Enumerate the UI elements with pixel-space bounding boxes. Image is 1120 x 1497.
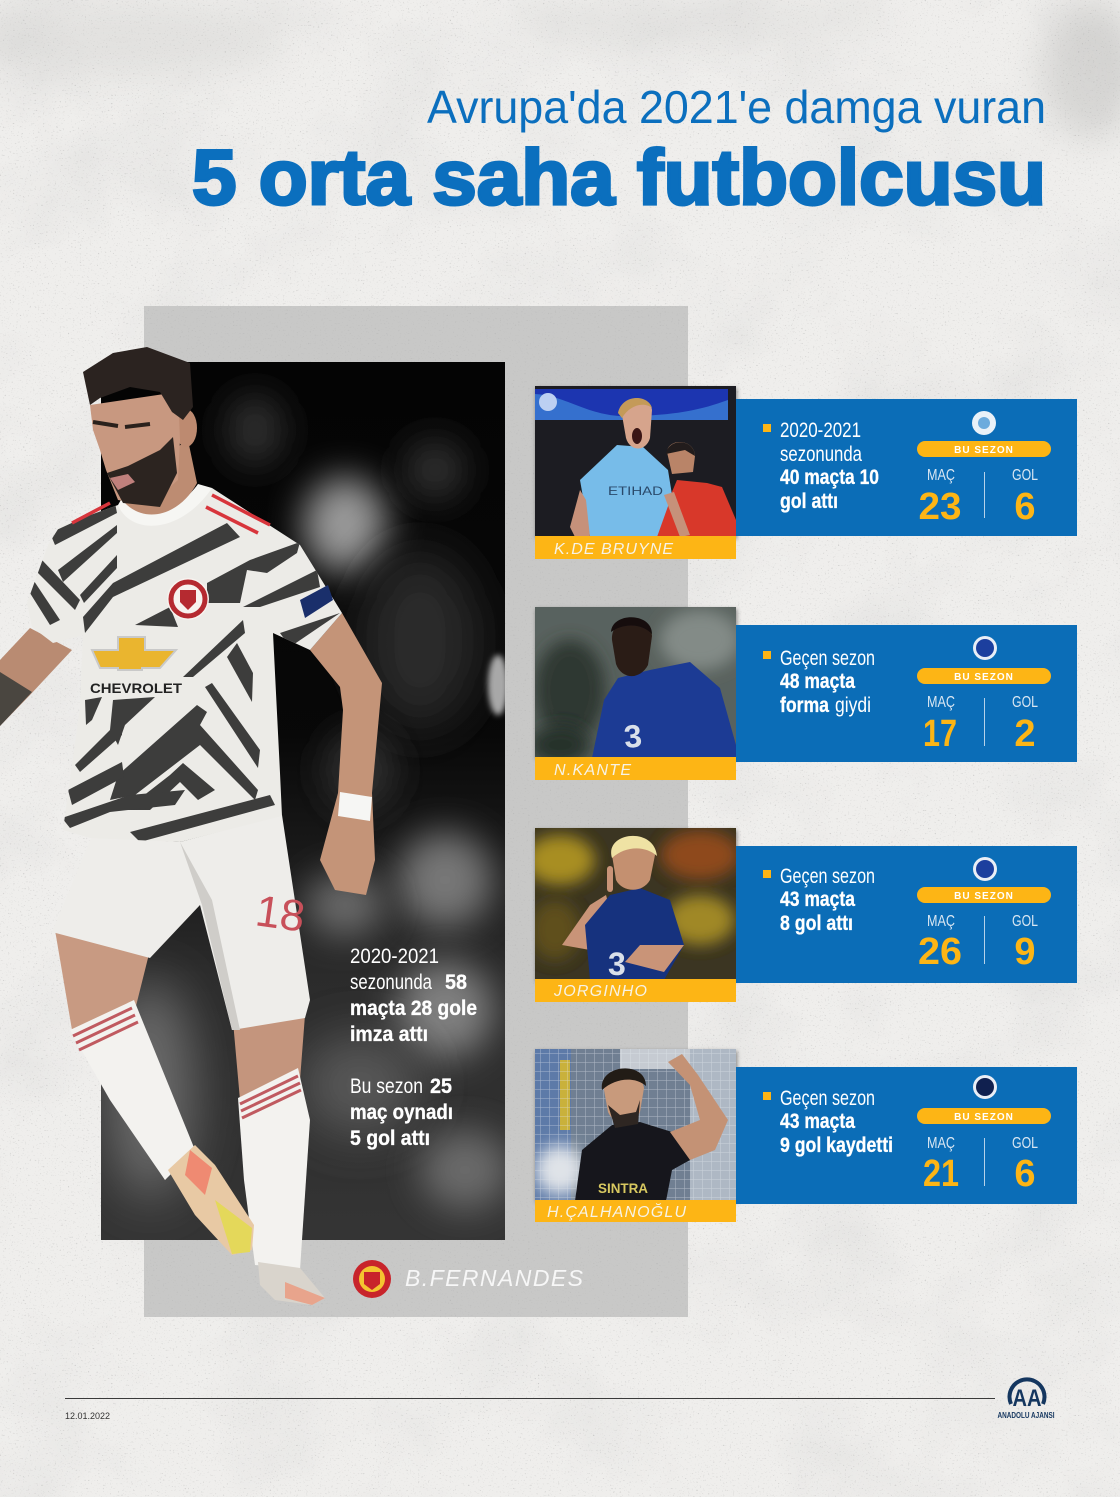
card 4: H. Calhanoglu — [535, 1049, 1077, 1222]
this-season pill: BU SEZON — [954, 891, 1014, 902]
photo: Jorginho — [525, 828, 740, 982]
main player stats text: maç oynadı — [350, 1101, 453, 1124]
name label: JORGINHO — [553, 983, 647, 1000]
left arm — [0, 628, 72, 726]
title line 2: 5 orta saha futbolcusu — [192, 133, 1046, 221]
match stat: 26 — [918, 931, 962, 973]
description — [780, 647, 875, 717]
name label: K.DE BRUYNE — [554, 541, 673, 558]
name label: H.ÇALHANOĞLU — [547, 1202, 686, 1221]
right arm and hand — [310, 613, 382, 895]
description: 8 gol attı — [780, 912, 853, 935]
player photo: B. Fernandes — [0, 347, 382, 1305]
goal stat — [1012, 913, 1038, 973]
description: 43 maçta — [780, 888, 855, 911]
wristband — [338, 792, 372, 821]
photo: Jorginho: 3 — [608, 946, 626, 982]
goal stat: 6 — [1014, 486, 1036, 528]
grey backing panel — [144, 306, 688, 1317]
black photo panel with blurred stadium lights — [101, 362, 510, 1240]
date: 12.01.2022 — [65, 1411, 110, 1421]
this-season pill: BU SEZON — [954, 445, 1014, 456]
this-season pill — [917, 887, 1051, 903]
main player stats text: imza attı — [350, 1023, 428, 1046]
main player name: B.FERNANDES — [405, 1265, 584, 1291]
shirt stripes — [25, 503, 340, 842]
description: Geçen sezon — [780, 1087, 875, 1110]
card 1: K. De Bruyne — [535, 386, 1077, 559]
stats panel — [736, 846, 1077, 983]
match stat: 21 — [923, 1153, 959, 1195]
description: giydi — [835, 694, 871, 717]
sponsor text: CHEVROLET — [90, 680, 182, 696]
footer rule — [65, 1398, 995, 1399]
sleeve badge — [300, 585, 333, 618]
goal stat: 9 — [1014, 931, 1036, 973]
description — [780, 1087, 893, 1157]
main player stats text: 2020-2021 — [350, 945, 439, 968]
shorts — [52, 815, 310, 1030]
eyes and brows — [93, 422, 150, 427]
neck — [124, 440, 197, 515]
description — [780, 419, 879, 513]
match stat: MAÇ — [927, 913, 955, 930]
Manchester United crest — [353, 1260, 391, 1298]
club crest on shirt — [167, 578, 209, 620]
match stat — [918, 913, 962, 973]
club logo: Manchester City — [972, 411, 996, 435]
title — [192, 81, 1046, 221]
club logo: Inter — [973, 1075, 997, 1099]
goal stat: GOL — [1012, 913, 1038, 930]
left boot — [168, 1145, 254, 1255]
stats panel — [736, 1067, 1077, 1204]
description: 2020-2021 — [780, 419, 861, 442]
main player stats text: 25 — [430, 1075, 452, 1098]
description: 40 maçta 10 — [780, 466, 879, 489]
description: Geçen sezon — [780, 647, 875, 670]
main player stats text — [350, 945, 477, 1150]
hair — [83, 347, 193, 420]
right boot — [258, 1262, 325, 1305]
photo: De Bruyne: ETIHAD — [608, 484, 663, 498]
Anadolu Ajansı logo: ANADOLU AJANSI — [998, 1411, 1054, 1420]
photo: Kante: 3 — [622, 718, 643, 755]
left sock — [70, 1000, 195, 1180]
match stat: MAÇ — [927, 694, 955, 711]
stats panel — [736, 399, 1077, 536]
bullet — [763, 1092, 771, 1100]
lips — [110, 474, 135, 490]
photo: Kante — [530, 607, 740, 765]
photo: De Bruyne — [535, 386, 736, 537]
match stat: MAÇ — [927, 1135, 955, 1152]
right sock — [238, 1068, 310, 1270]
goal stat — [1012, 694, 1038, 755]
match stat — [923, 1135, 959, 1195]
name label — [535, 979, 736, 1002]
goal stat: GOL — [1012, 467, 1038, 484]
card 2: N. Kante — [530, 607, 1077, 780]
this-season pill — [917, 668, 1051, 684]
stats panel — [736, 625, 1077, 762]
goal stat: 2 — [1014, 713, 1036, 755]
tattoo — [0, 672, 32, 726]
main player stats text: sezonunda — [350, 971, 432, 994]
player photo: B. Fernandes: 18 — [253, 886, 308, 942]
this-season pill: BU SEZON — [954, 1112, 1014, 1123]
goal stat: GOL — [1012, 1135, 1038, 1152]
name label — [535, 536, 736, 559]
description: gol attı — [780, 490, 838, 513]
shirt collar — [118, 484, 212, 526]
Anadolu Ajansı logo: AA — [1012, 1385, 1042, 1412]
bullet — [763, 870, 771, 878]
match stat — [918, 467, 962, 528]
this-season pill — [917, 441, 1051, 457]
club logo: Chelsea — [973, 857, 997, 881]
card 3: Jorginho — [525, 828, 1077, 1002]
title line 1: Avrupa'da 2021'e damga vuran — [427, 81, 1046, 133]
goal stat — [1012, 467, 1038, 528]
description: 9 gol kaydetti — [780, 1134, 893, 1157]
goal stat: 6 — [1014, 1153, 1036, 1195]
club logo: Chelsea — [973, 636, 997, 660]
sponsor logo — [92, 637, 176, 670]
main player stats text: maçta 28 gole — [350, 997, 477, 1020]
description: sezonunda — [780, 443, 862, 466]
description: 43 maçta — [780, 1110, 855, 1133]
face — [90, 392, 180, 505]
ear — [175, 409, 197, 447]
description: 48 maçta — [780, 670, 855, 693]
legs — [55, 930, 190, 1180]
description: forma — [780, 694, 829, 717]
this-season pill: BU SEZON — [954, 672, 1014, 683]
match stat — [923, 694, 957, 755]
Anadolu Ajansı logo — [998, 1379, 1054, 1420]
name label — [535, 1200, 736, 1222]
match stat: MAÇ — [927, 467, 955, 484]
goal stat: GOL — [1012, 694, 1038, 711]
description — [780, 865, 875, 935]
this-season pill — [917, 1108, 1051, 1124]
bullet — [763, 651, 771, 659]
beard — [107, 437, 177, 507]
name label — [535, 757, 736, 780]
bullet — [763, 424, 771, 432]
match stat: 23 — [918, 486, 962, 528]
shirt — [27, 488, 342, 842]
photo: Calhanoglu: SINTRA — [598, 1180, 648, 1196]
main player stats text: Bu sezon — [350, 1075, 423, 1098]
name label: N.KANTE — [554, 762, 631, 779]
match stat: 17 — [923, 713, 957, 755]
photo: Calhanoglu — [535, 1049, 736, 1201]
description: Geçen sezon — [780, 865, 875, 888]
main player stats text: 5 gol attı — [350, 1127, 430, 1150]
goal stat — [1012, 1135, 1038, 1195]
main player stats text: 58 — [445, 971, 467, 994]
shoulder stripes — [72, 495, 270, 533]
